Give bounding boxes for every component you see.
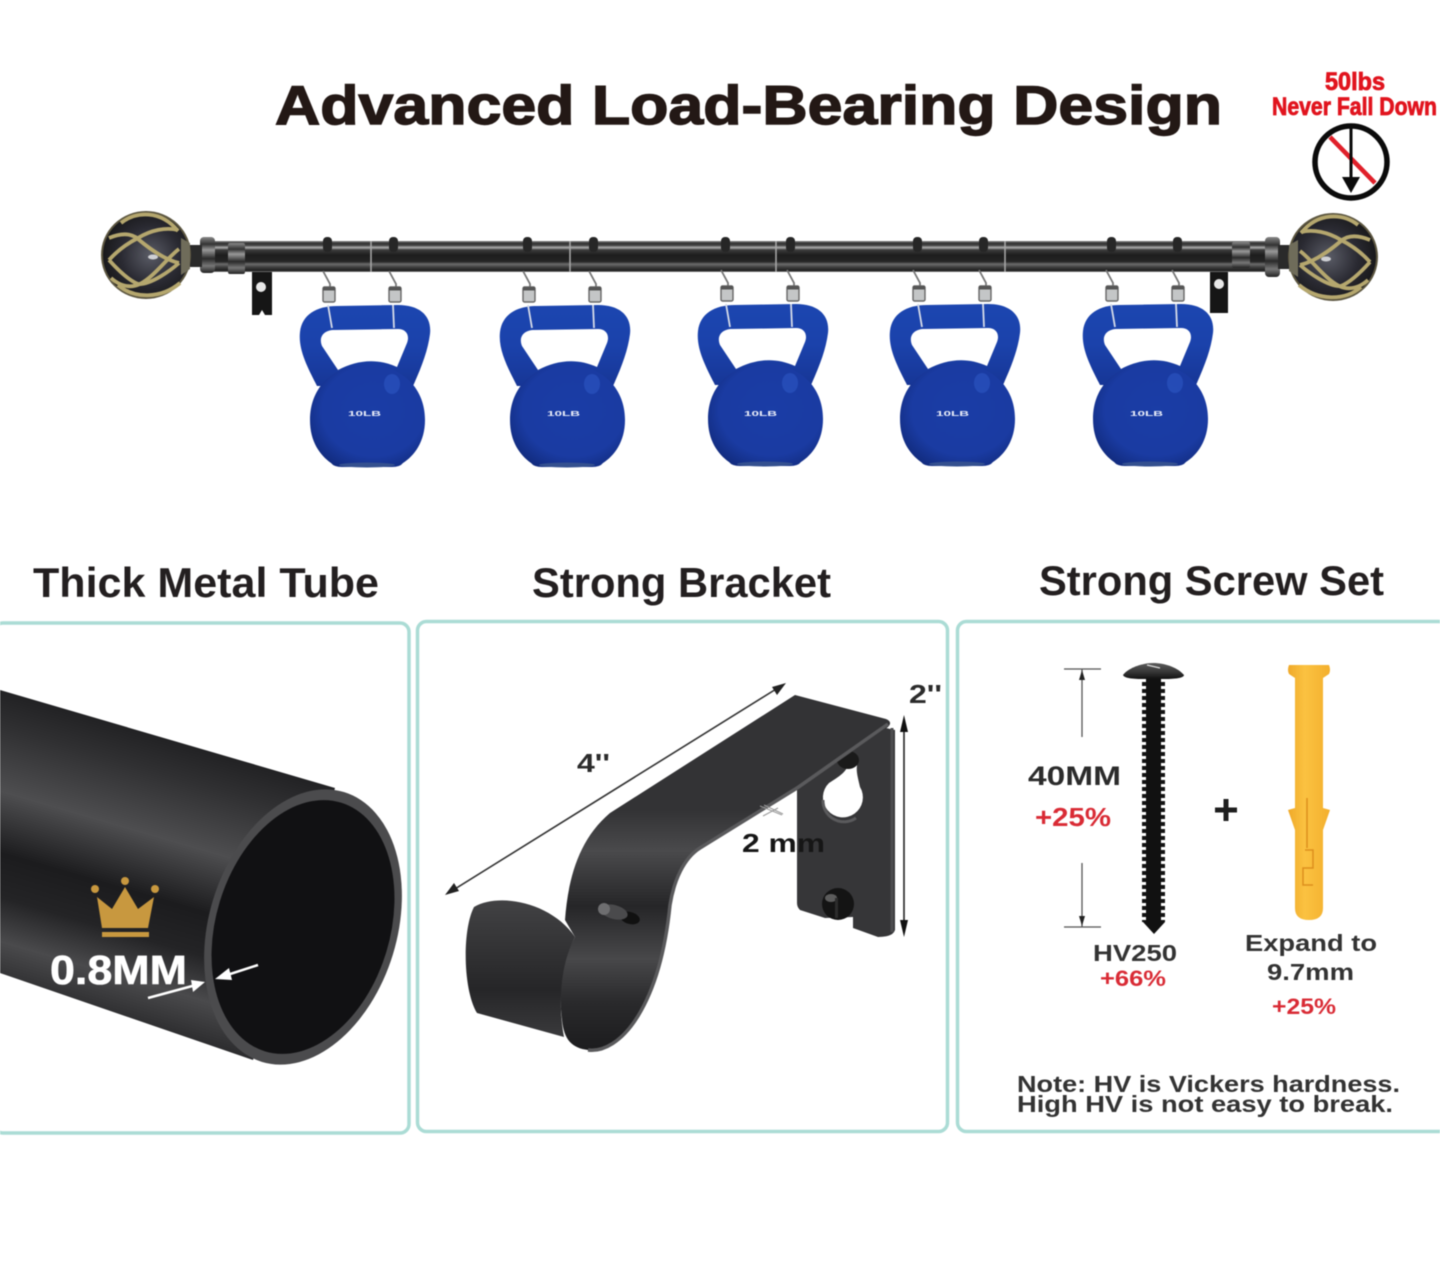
label: +25% length: +25% bbox=[1035, 802, 1111, 832]
bracket arm edge bbox=[588, 724, 888, 1050]
label: +25% expansion: +25% bbox=[1272, 994, 1336, 1019]
panel: thick metal tube bbox=[0, 623, 434, 1133]
label: 2 mm: 2 mm bbox=[742, 828, 825, 858]
tube end rim bbox=[172, 765, 434, 1089]
kettlebell 5 bbox=[1083, 270, 1213, 466]
label: expand to 9.7mm: Expand to bbox=[1245, 930, 1377, 956]
kettlebell 3 bbox=[698, 270, 828, 466]
kettlebell 2: 10LB bbox=[547, 409, 581, 418]
rod collars bbox=[190, 237, 1290, 277]
label: wall thickness: 0.8MM bbox=[50, 947, 187, 993]
bracket hook cup bbox=[466, 900, 575, 1037]
kettlebell 2 bbox=[500, 271, 630, 468]
callout: 50lbs never fall down bbox=[1272, 68, 1437, 121]
kettlebell 1: 10LB bbox=[348, 409, 382, 418]
dimension arrow: 2 inch bbox=[900, 715, 908, 937]
bracket back plate bbox=[797, 728, 895, 937]
heading: thick metal tube: Thick Metal Tube bbox=[33, 559, 379, 606]
label: 4 inch: 4'' bbox=[577, 748, 610, 778]
plate edge bbox=[890, 728, 894, 932]
icon: screw bbox=[1123, 663, 1184, 934]
kettlebell 1 bbox=[300, 271, 430, 468]
label: +66%: +66% bbox=[1100, 966, 1166, 991]
arrow: thickness outer bbox=[148, 980, 205, 998]
note: High HV is not easy to break. bbox=[1017, 1091, 1393, 1117]
heading: strong bracket: Strong Bracket bbox=[532, 559, 831, 606]
bracket stud bbox=[598, 902, 641, 926]
panel: strong screw set bbox=[958, 622, 1440, 1132]
label: 2 inch: 2'' bbox=[909, 679, 942, 709]
arrow: thickness inner bbox=[215, 965, 258, 980]
upper screw bbox=[837, 751, 859, 769]
dimension lines: 40mm bbox=[1064, 669, 1101, 927]
callout: 50lbs never fall down: 50lbs bbox=[1325, 68, 1385, 96]
right finial bbox=[1289, 214, 1377, 300]
kettlebell 5: 10LB bbox=[1130, 409, 1164, 418]
icon: no falling bbox=[1315, 126, 1387, 198]
kettlebell 4: 10LB bbox=[936, 409, 970, 418]
lower screw bbox=[822, 888, 854, 920]
label: expand to 9.7mm bbox=[1245, 930, 1377, 985]
note bbox=[1017, 1071, 1400, 1117]
panel: strong bracket bbox=[418, 622, 948, 1132]
title: Advanced Load-Bearing Design bbox=[275, 74, 1222, 136]
tube opening bbox=[182, 777, 424, 1077]
icon: wall anchor bbox=[1288, 665, 1330, 920]
left finial bbox=[102, 212, 190, 298]
label: HV250: HV250 bbox=[1093, 940, 1177, 966]
plus sign bbox=[1215, 799, 1237, 821]
dimension arrow: 4 inch bbox=[445, 683, 786, 895]
note: Note: HV is Vickers hardness. bbox=[1017, 1071, 1400, 1097]
label: expand to 9.7mm: 9.7mm bbox=[1267, 959, 1354, 985]
icon: crown bbox=[91, 877, 159, 937]
kettlebell 3: 10LB bbox=[744, 409, 778, 418]
rod tube bbox=[205, 241, 1275, 272]
tube body bbox=[0, 690, 335, 1060]
rod brackets bbox=[252, 272, 1228, 315]
thickness ticks bbox=[760, 805, 783, 816]
rod ring studs bbox=[323, 237, 1182, 252]
heading: strong screw set: Strong Screw Set bbox=[1039, 557, 1384, 604]
label: 40mm: 40MM bbox=[1028, 761, 1121, 791]
keyhole bbox=[823, 765, 863, 822]
kettlebell 4 bbox=[890, 270, 1020, 466]
curtain rod with finials bbox=[102, 212, 1377, 315]
rod seams bbox=[371, 241, 1005, 272]
bracket arm and hook bbox=[561, 695, 890, 1050]
